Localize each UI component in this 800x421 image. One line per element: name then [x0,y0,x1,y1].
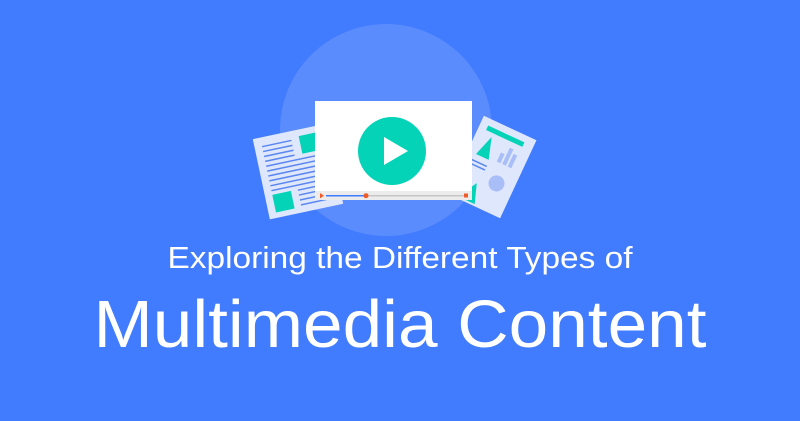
illustration: video player [315,101,472,200]
subtitle: Exploring the Different Types of [168,240,633,275]
illustration: left document [253,124,343,219]
title: Multimedia Content [94,287,707,362]
illustration: right document [448,116,536,218]
icon: play button [358,117,426,185]
background circle [280,24,492,236]
